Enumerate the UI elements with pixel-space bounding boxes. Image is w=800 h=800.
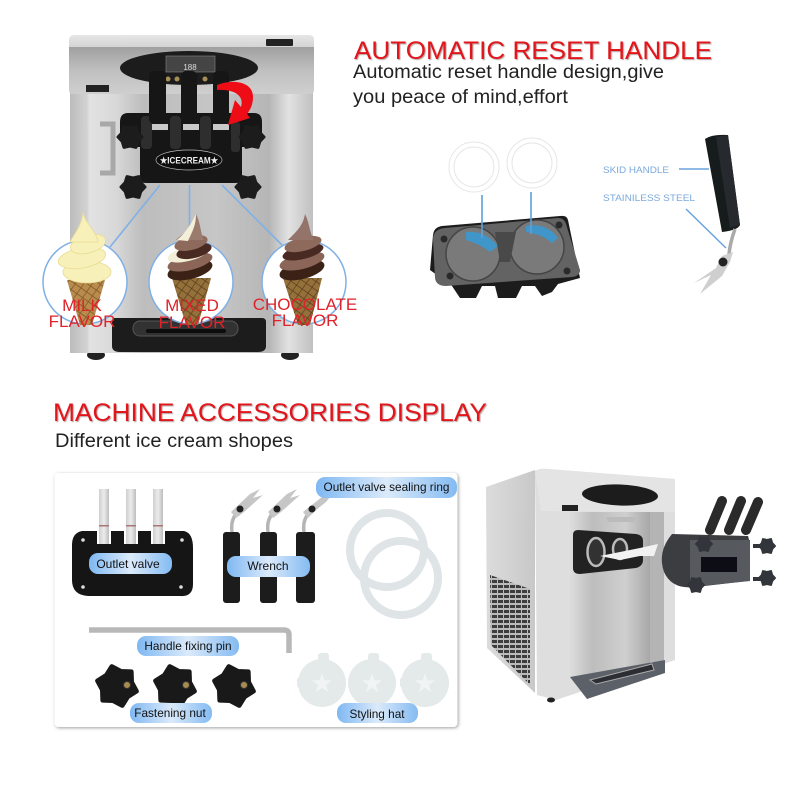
- heading: machine accessories display: MACHINE ACCESSORIES DISPLAY: [53, 399, 487, 427]
- display screen: 188: [183, 63, 197, 72]
- door badge: [562, 505, 578, 511]
- nozzle rings: [588, 538, 627, 566]
- flavor connector lines: [110, 185, 284, 247]
- flavor labels: [49, 295, 357, 332]
- control buttons: [166, 76, 208, 82]
- accessory: fastening nuts: [93, 664, 258, 723]
- detached handles: [710, 501, 758, 530]
- accessory: wrench: Wrench: [247, 559, 289, 573]
- connector flash: [600, 544, 658, 560]
- panel: accessories: [54, 473, 458, 727]
- label: milk flavor: MILK: [62, 296, 102, 315]
- accessory: styling hats: [297, 653, 449, 723]
- control oval: [582, 483, 658, 507]
- label: chocolate flavor: FLAVOR: [272, 311, 338, 330]
- pointer: stainless steel: [686, 209, 726, 248]
- icecream logo: [156, 150, 222, 170]
- icecream logo: ★ICECREAM★: [160, 156, 219, 166]
- flavor: mixed: [149, 214, 233, 325]
- subheading: Different ice cream shopes: [55, 431, 293, 452]
- accessory: outlet valve: Outlet valve: [96, 557, 160, 571]
- accessory: handle fixing pin: [89, 630, 289, 656]
- detached knobs: [688, 537, 775, 592]
- machine feet: [87, 350, 299, 360]
- drip tray: [570, 660, 665, 699]
- label: milk flavor: FLAVOR: [49, 312, 115, 331]
- pointer: skid handle: [679, 168, 709, 170]
- accessory: styling hats: ★: [310, 668, 334, 698]
- label: skid handle: SKID HANDLE: [603, 165, 669, 176]
- description text: you peace of mind,effort: [353, 87, 569, 108]
- handle mounts: [152, 124, 229, 130]
- nozzle panel: [573, 530, 643, 574]
- valve housing: [430, 216, 580, 298]
- seal pointer lines: [482, 192, 531, 238]
- accessory: styling hats: ★: [413, 668, 437, 698]
- valve covers: [141, 116, 240, 152]
- valve face: [690, 540, 750, 587]
- label: stainless steel: STAINILESS STEEL: [603, 193, 695, 204]
- valve block: [120, 113, 262, 183]
- machine body: [70, 92, 313, 353]
- label: chocolate flavor: CHOCOLATE: [253, 295, 357, 314]
- machine head band: [535, 469, 675, 512]
- right door column: [650, 512, 664, 662]
- machine side panel: [486, 470, 535, 693]
- detached valve block: [662, 534, 750, 587]
- soft serve machine with flavors: [43, 35, 346, 360]
- side handle: [100, 124, 113, 173]
- three handles: [149, 71, 229, 124]
- model badge: [266, 39, 293, 46]
- flavor: chocolate: [262, 214, 346, 325]
- valve recess: [701, 557, 737, 572]
- drip shelf: [606, 517, 636, 522]
- label: mixed flavor: FLAVOR: [159, 313, 225, 332]
- accessory: handle fixing pin: Handle fixing pin: [144, 639, 232, 653]
- control panel oval: [120, 51, 258, 85]
- accessory: styling hats: ★: [360, 668, 384, 698]
- description text: Automatic reset handle design,give: [353, 62, 664, 83]
- star knobs: [118, 127, 264, 197]
- machine head: [69, 47, 314, 94]
- machine top cap: [69, 35, 314, 47]
- label: mixed flavor: MIXED: [165, 296, 219, 315]
- drip tray: [112, 318, 266, 352]
- accessory: sealing rings: [350, 513, 438, 615]
- accessory: outlet valve: [72, 489, 193, 596]
- label: outlet valve sealing ring: [316, 477, 457, 498]
- label: outlet valve sealing ring: Outlet valve sealing ring: [324, 480, 449, 494]
- display screen: [166, 56, 215, 72]
- flavor: milk: [43, 212, 127, 325]
- door tag: [86, 85, 109, 92]
- machine foot: [547, 698, 555, 702]
- door recess: [568, 512, 650, 677]
- accessory: wrench: [223, 489, 334, 603]
- machine with detached valve: [486, 469, 775, 702]
- accessory: fastening nuts: Fastening nut: [134, 706, 206, 720]
- sealing rings: [449, 138, 557, 192]
- side vent grille: [490, 575, 530, 685]
- machine front: [535, 469, 675, 700]
- description text: [353, 62, 664, 108]
- heading: automatic reset handle: AUTOMATIC RESET HANDLE: [354, 37, 712, 65]
- skid handle detail: [694, 135, 740, 294]
- red reset arrow: [217, 82, 253, 125]
- accessory: styling hats: Styling hat: [349, 707, 405, 721]
